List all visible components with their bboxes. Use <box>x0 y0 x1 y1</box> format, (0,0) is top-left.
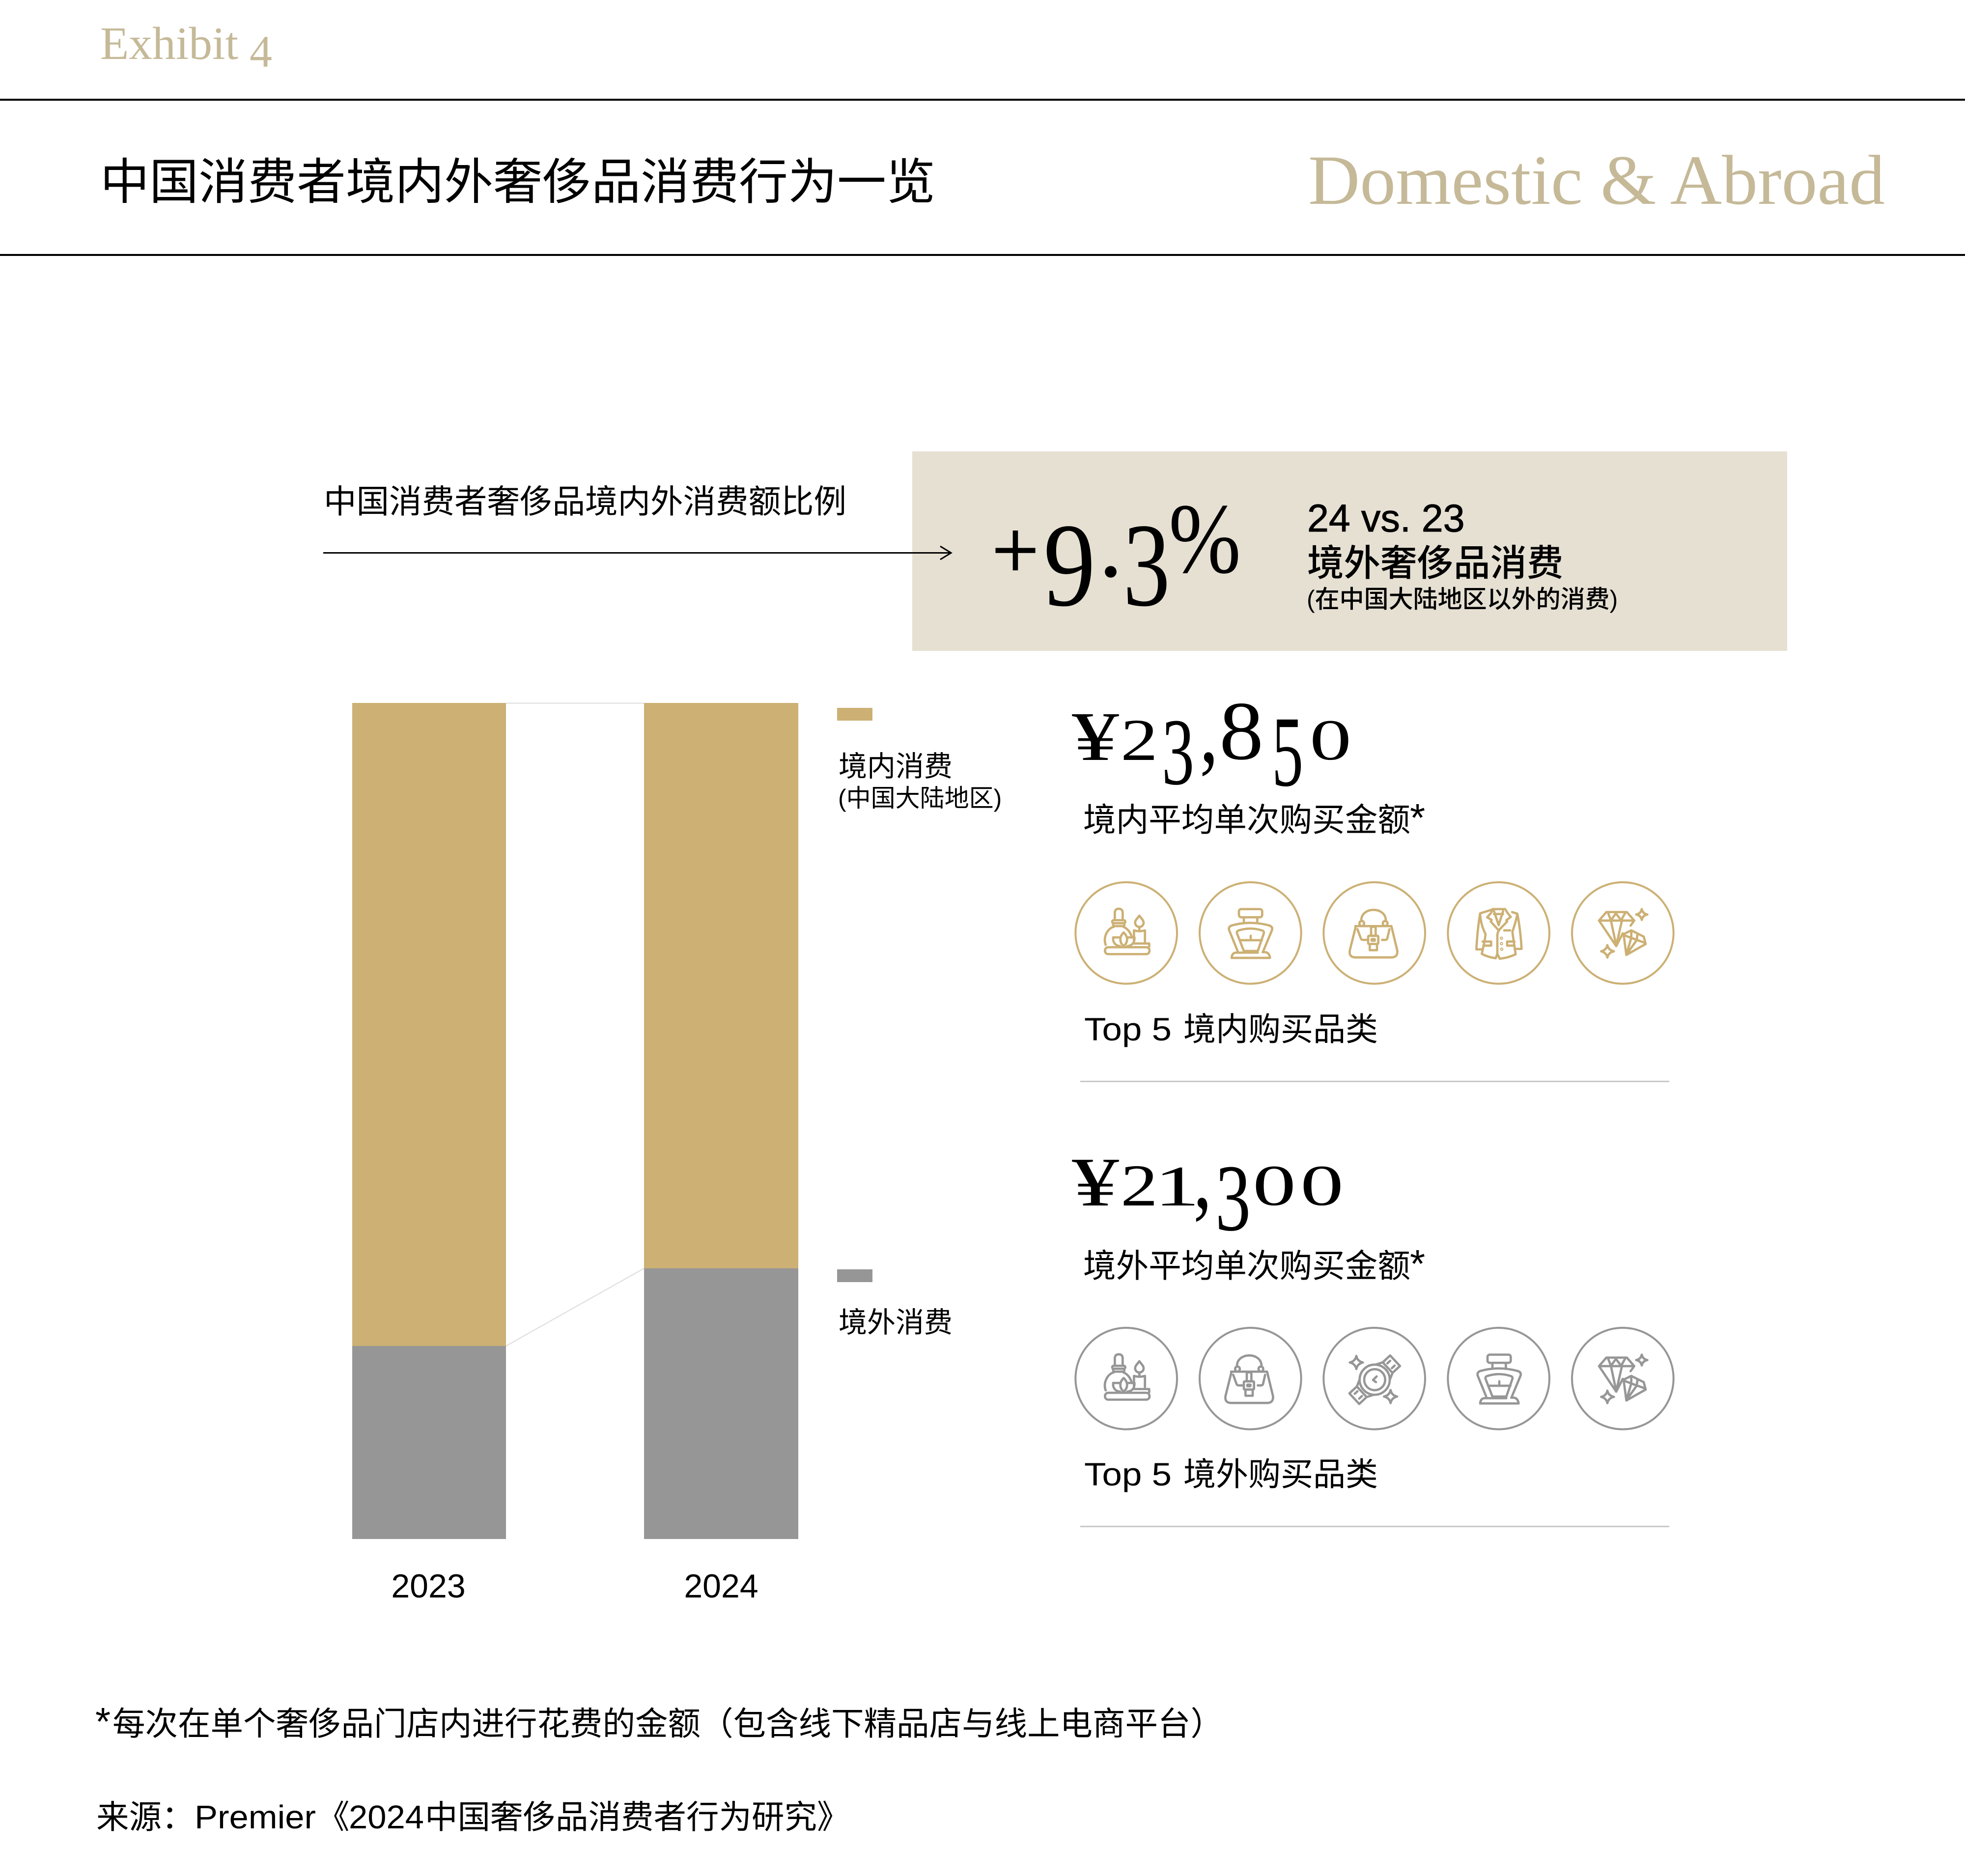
title: 中国消费者境内外奢侈品消费行为一览 <box>100 155 935 210</box>
icon: candle and oil, grey <box>1075 1328 1177 1429</box>
domestic top 5 label <box>1084 1011 1378 1047</box>
exhibit label: Exhibit <box>100 18 238 69</box>
bar 2023 <box>352 703 506 1539</box>
domestic average amount <box>1072 679 1351 808</box>
callout panel: +9.3% <box>912 451 1787 651</box>
icon: jacket, gold <box>1448 882 1549 984</box>
icon: perfume, gold <box>1200 882 1301 984</box>
footnote: * <box>95 1700 111 1743</box>
chart subtitle: 中国消费者奢侈品境内外消费额比例 <box>324 484 846 520</box>
domestic average amount: 2 <box>1121 707 1158 773</box>
abroad top 5 label: 境外购买品类 <box>1183 1456 1378 1492</box>
legend: domestic: 境内消费 <box>839 751 953 783</box>
callout text: 24 vs. 23 <box>1307 496 1465 540</box>
icon: diamonds, grey <box>1572 1328 1674 1429</box>
domestic average amount: 3 <box>1162 699 1194 805</box>
abroad top 5 label <box>1084 1456 1378 1492</box>
big number +9.3%: % <box>1169 483 1241 594</box>
icon: handbag, grey <box>1200 1328 1301 1429</box>
domestic average amount: ¥ <box>1072 698 1119 775</box>
domestic average amount: 0 <box>1310 708 1351 772</box>
big number +9.3%: 9 <box>1043 499 1095 631</box>
source: 中国奢侈品消费者行为研究》 <box>425 1799 850 1836</box>
year labels <box>391 1568 758 1605</box>
source: 《 <box>317 1799 350 1836</box>
domestic top 5 label: 境内购买品类 <box>1183 1011 1378 1047</box>
callout text <box>1307 496 1618 613</box>
abroad average amount: 0 <box>1253 1153 1296 1218</box>
abroad average amount: 2 <box>1121 1153 1158 1219</box>
domestic average label: * <box>1410 796 1425 840</box>
icon: handbag, gold <box>1323 882 1425 984</box>
icon: diamonds, gold <box>1572 882 1674 984</box>
domestic average amount: , <box>1200 679 1218 783</box>
stacked bar chart <box>352 703 798 1605</box>
domestic average label: 境内平均单次购买金额 <box>1083 802 1410 839</box>
legend: domestic <box>837 708 1002 812</box>
abroad average amount: 0 <box>1300 1153 1344 1218</box>
source <box>96 1799 850 1836</box>
icon: candle and oil, gold <box>1075 882 1177 984</box>
abroad average amount: 3 <box>1215 1145 1251 1251</box>
source: 2024 <box>349 1799 424 1836</box>
source: Premier <box>195 1799 316 1836</box>
big number +9.3%: . <box>1098 489 1123 598</box>
callout text: 境外奢侈品消费 <box>1307 543 1564 584</box>
exhibit label <box>100 18 272 77</box>
domestic top 5 label: Top 5 <box>1084 1011 1172 1047</box>
arrow <box>323 546 951 560</box>
exhibit label: 4 <box>250 27 272 77</box>
domestic average amount: 5 <box>1272 696 1303 808</box>
big number +9.3%: + <box>992 504 1039 596</box>
abroad average amount: , <box>1193 1125 1212 1228</box>
section heading: Domestic & Abroad: Domestic & Abroad <box>1308 141 1885 220</box>
year labels: 2023 <box>391 1568 466 1605</box>
abroad average amount: ¥ <box>1072 1143 1119 1221</box>
abroad top 5 label: Top 5 <box>1084 1456 1172 1492</box>
icon: watch, grey <box>1323 1328 1425 1429</box>
abroad average label: * <box>1410 1242 1425 1286</box>
footnote: 每次在单个奢侈品门店内进行花费的金额（包含线下精品店与线上电商平台） <box>112 1706 1223 1742</box>
legend: domestic: (中国大陆地区) <box>838 784 1002 812</box>
callout text: (在中国大陆地区以外的消费) <box>1307 586 1618 613</box>
bar 2024 <box>644 703 798 1539</box>
domestic average amount: 8 <box>1219 685 1263 777</box>
legend: abroad <box>837 1269 953 1339</box>
big number +9.3% <box>992 483 1241 631</box>
big number +9.3%: 3 <box>1123 499 1170 631</box>
source: 来源： <box>96 1799 195 1836</box>
abroad average amount: 1 <box>1154 1155 1200 1218</box>
abroad average label: 境外平均单次购买金额 <box>1083 1248 1410 1285</box>
abroad average amount <box>1072 1125 1344 1251</box>
icon: perfume, grey <box>1448 1328 1549 1429</box>
year labels: 2024 <box>684 1568 758 1605</box>
legend: abroad: 境外消费 <box>839 1307 953 1339</box>
